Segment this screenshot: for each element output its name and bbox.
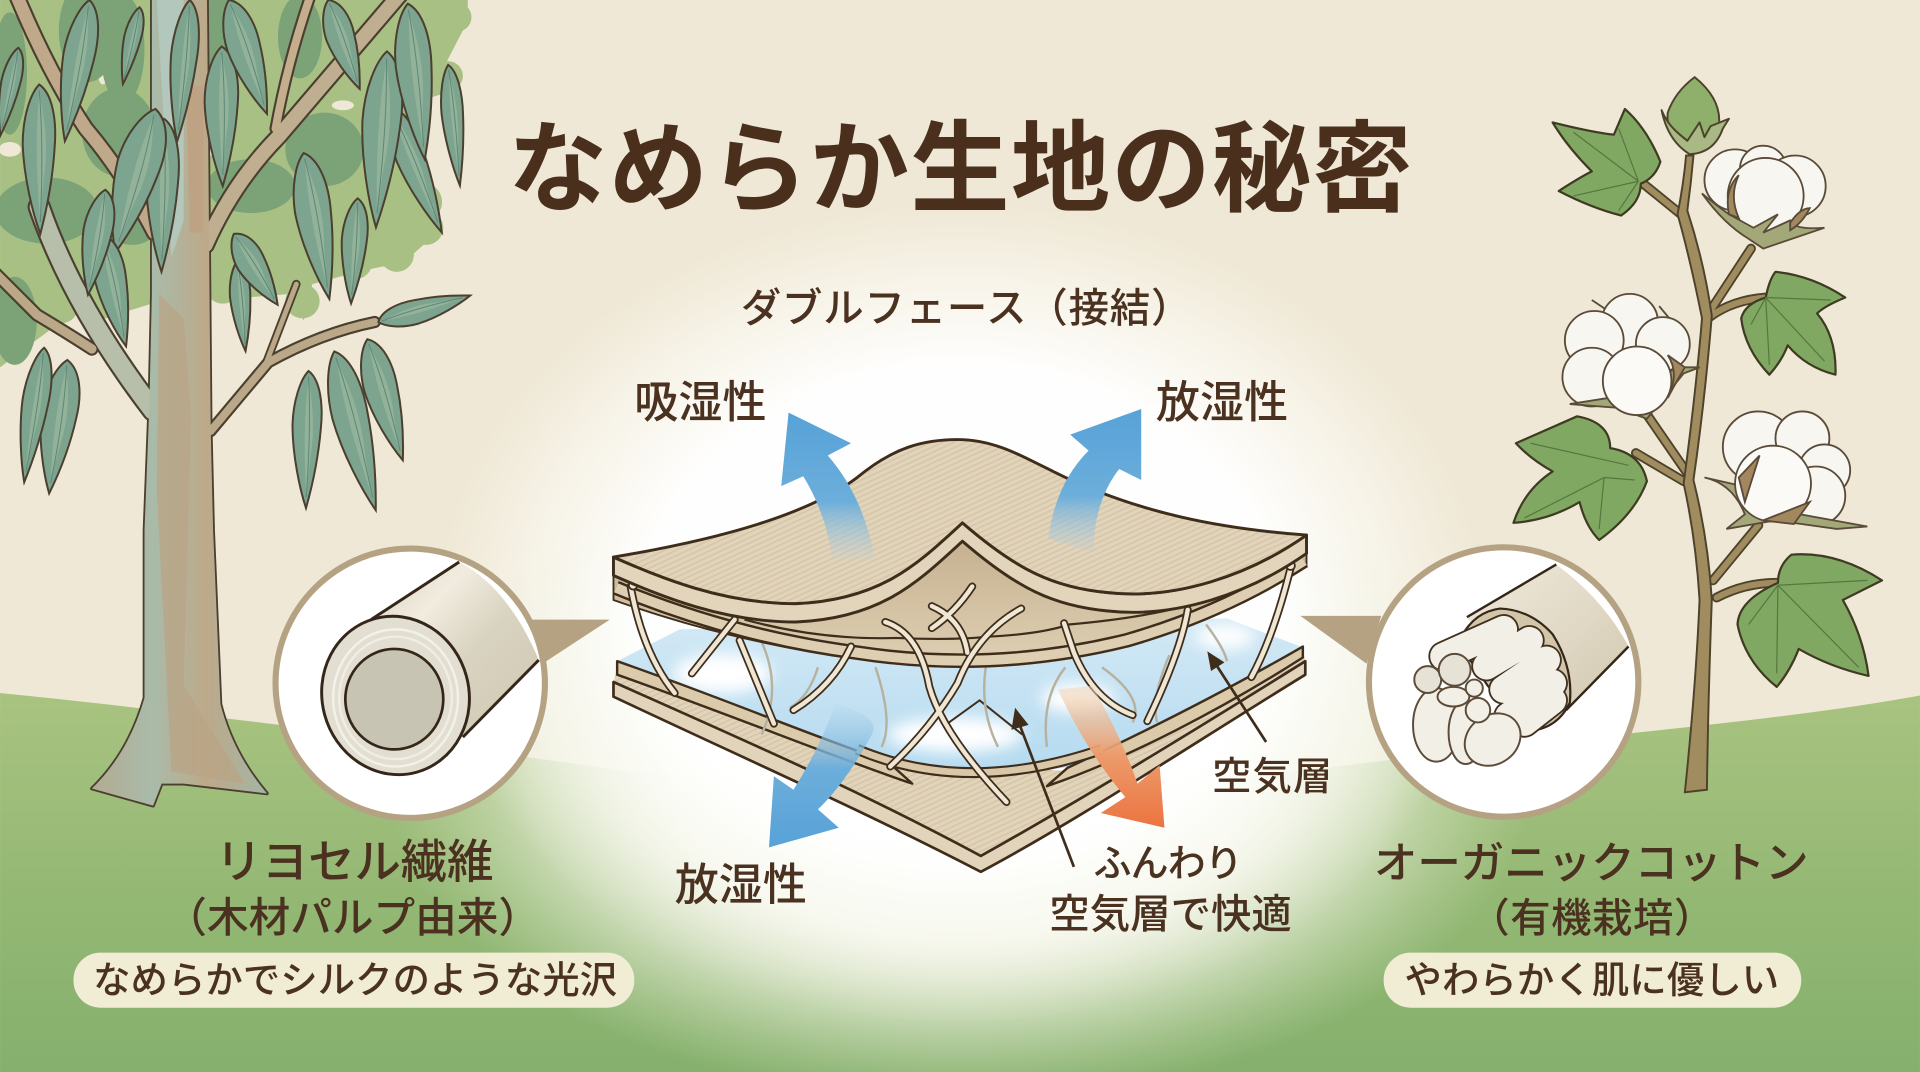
cotton boll middle [1562,294,1700,419]
pointer line: air layer right [1207,651,1266,742]
arrow: release upper [1048,409,1141,553]
callout: fluffy air: ふんわり [1093,844,1243,886]
title: なめらか生地の秘密 [508,114,1412,225]
fabric underside [613,527,1307,667]
sheath edge [1467,564,1629,710]
label: release lower: 放湿性 [675,861,807,910]
cotton stem [1678,156,1712,792]
pointer right [1300,616,1381,664]
branches outline [0,0,400,806]
connecting band [616,561,1304,661]
cotton plant [1513,77,1882,792]
hollow tube [304,562,539,791]
pill text: やわらかく肌に優しい [1404,959,1779,1001]
top sheet thickness [613,523,1307,622]
sub heading: lyocell: （木材パルプ由来） [165,894,540,941]
air layer [617,618,1300,774]
lower sheet inner surface [613,649,1305,857]
sub heading: organic cotton: （有機栽培） [1469,895,1714,941]
arrow: absorption [781,413,876,561]
top sheet surface [613,440,1307,604]
sheath [1467,564,1629,710]
fabric diagram [613,440,1307,872]
label: air layer: 空気層 [1212,756,1332,799]
magnifier: lyocell fiber [276,549,545,818]
label: absorb: 吸湿性 [634,379,767,428]
subtitle: ダブルフェース（接結） [741,285,1191,331]
eucalyptus leaves [0,0,474,515]
upper strip of lower sheet right [1047,647,1303,786]
cotton leaf veins [1524,129,1867,673]
center curved band [857,700,1102,773]
cotton boll lower [1704,411,1867,529]
thin fibers [759,624,1227,747]
pill: organic cotton [1384,953,1801,1008]
ground [0,693,1920,1072]
callout: comfort: 空気層で快適 [1049,891,1292,937]
fiber rods [1444,629,1553,722]
pointer left [531,620,610,666]
cotton branches [1636,184,1777,598]
fiber bundle end [1413,654,1531,776]
arrow: release lower [769,704,874,847]
branches fill [0,0,400,806]
label: release right: 放湿性 [1156,379,1288,428]
eucalyptus tree [0,0,474,806]
collar [1458,609,1570,731]
heading: lyocell: リヨセル繊維 [216,836,493,888]
cotton boll top [1702,146,1826,249]
connecting fibers [631,568,1291,802]
lower sheet edge band [613,661,1305,872]
magnifier: organic cotton fiber [1369,547,1638,817]
upper strip of lower sheet left [617,661,912,784]
pill: lyocell [74,953,634,1008]
air clouds [673,624,1254,752]
fiber knots [629,561,1295,590]
cotton leaves [1513,109,1882,687]
pill text: なめらかでシルクのような光沢 [93,959,617,1001]
pointer line: air layer center [1011,708,1074,867]
arrow: warmth [1058,686,1164,828]
heading: organic cotton: オーガニックコットン [1374,840,1809,888]
foliage [0,0,471,367]
cotton bud [1662,77,1729,154]
